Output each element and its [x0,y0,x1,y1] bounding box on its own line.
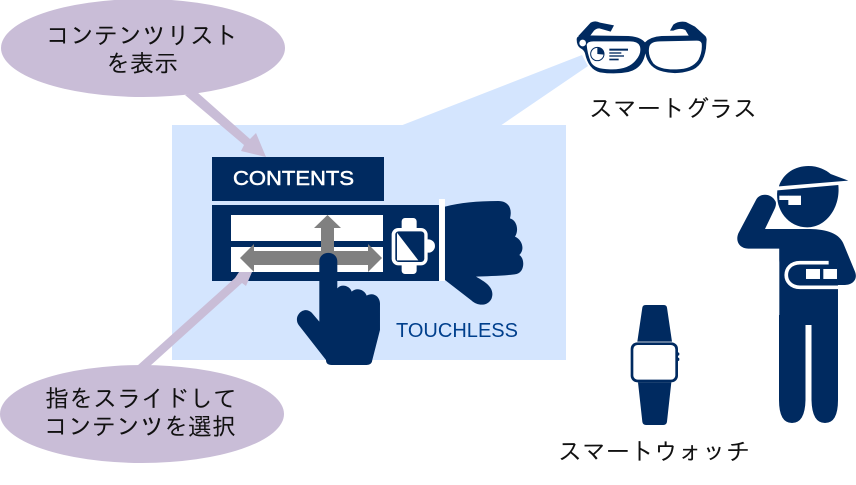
callout: content list: を表示 [106,51,178,78]
icon: pointing hand [297,253,380,365]
callout: content list: コンテンツリスト [46,23,238,50]
arrow: bottom callout pointer [137,272,252,366]
label: touchless: TOUCHLESS [396,320,518,342]
person: body and arms [737,195,856,285]
projection beam from glasses [400,55,588,126]
heading: contents bar: CONTENTS [233,168,354,190]
callout: slide finger to select [0,365,284,463]
icon: fist [445,201,523,305]
person: wristband [786,263,839,287]
person: head and cap [779,166,848,186]
callout: slide finger to select: 指をスライドして [45,386,237,413]
callout: slide finger to select: コンテンツを選択 [44,414,236,441]
icon: smart glasses [577,21,707,73]
icon: person wearing glasses and watch [737,166,856,320]
label: smart glasses: スマートグラス [589,96,757,123]
callout: content list [1,0,285,97]
icon: smart watch [631,305,679,425]
arrow: gray horizontal double arrow [240,244,382,272]
person: legs [779,315,838,423]
wrist band with content list [212,199,445,281]
panel: touchless background [172,125,566,360]
arrow: gray up arrow [314,215,341,258]
label: smart watch: スマートウォッチ [558,439,750,466]
heading: contents bar [212,157,384,201]
icon: small watch [392,218,435,274]
arrow: top callout pointer [185,92,266,157]
